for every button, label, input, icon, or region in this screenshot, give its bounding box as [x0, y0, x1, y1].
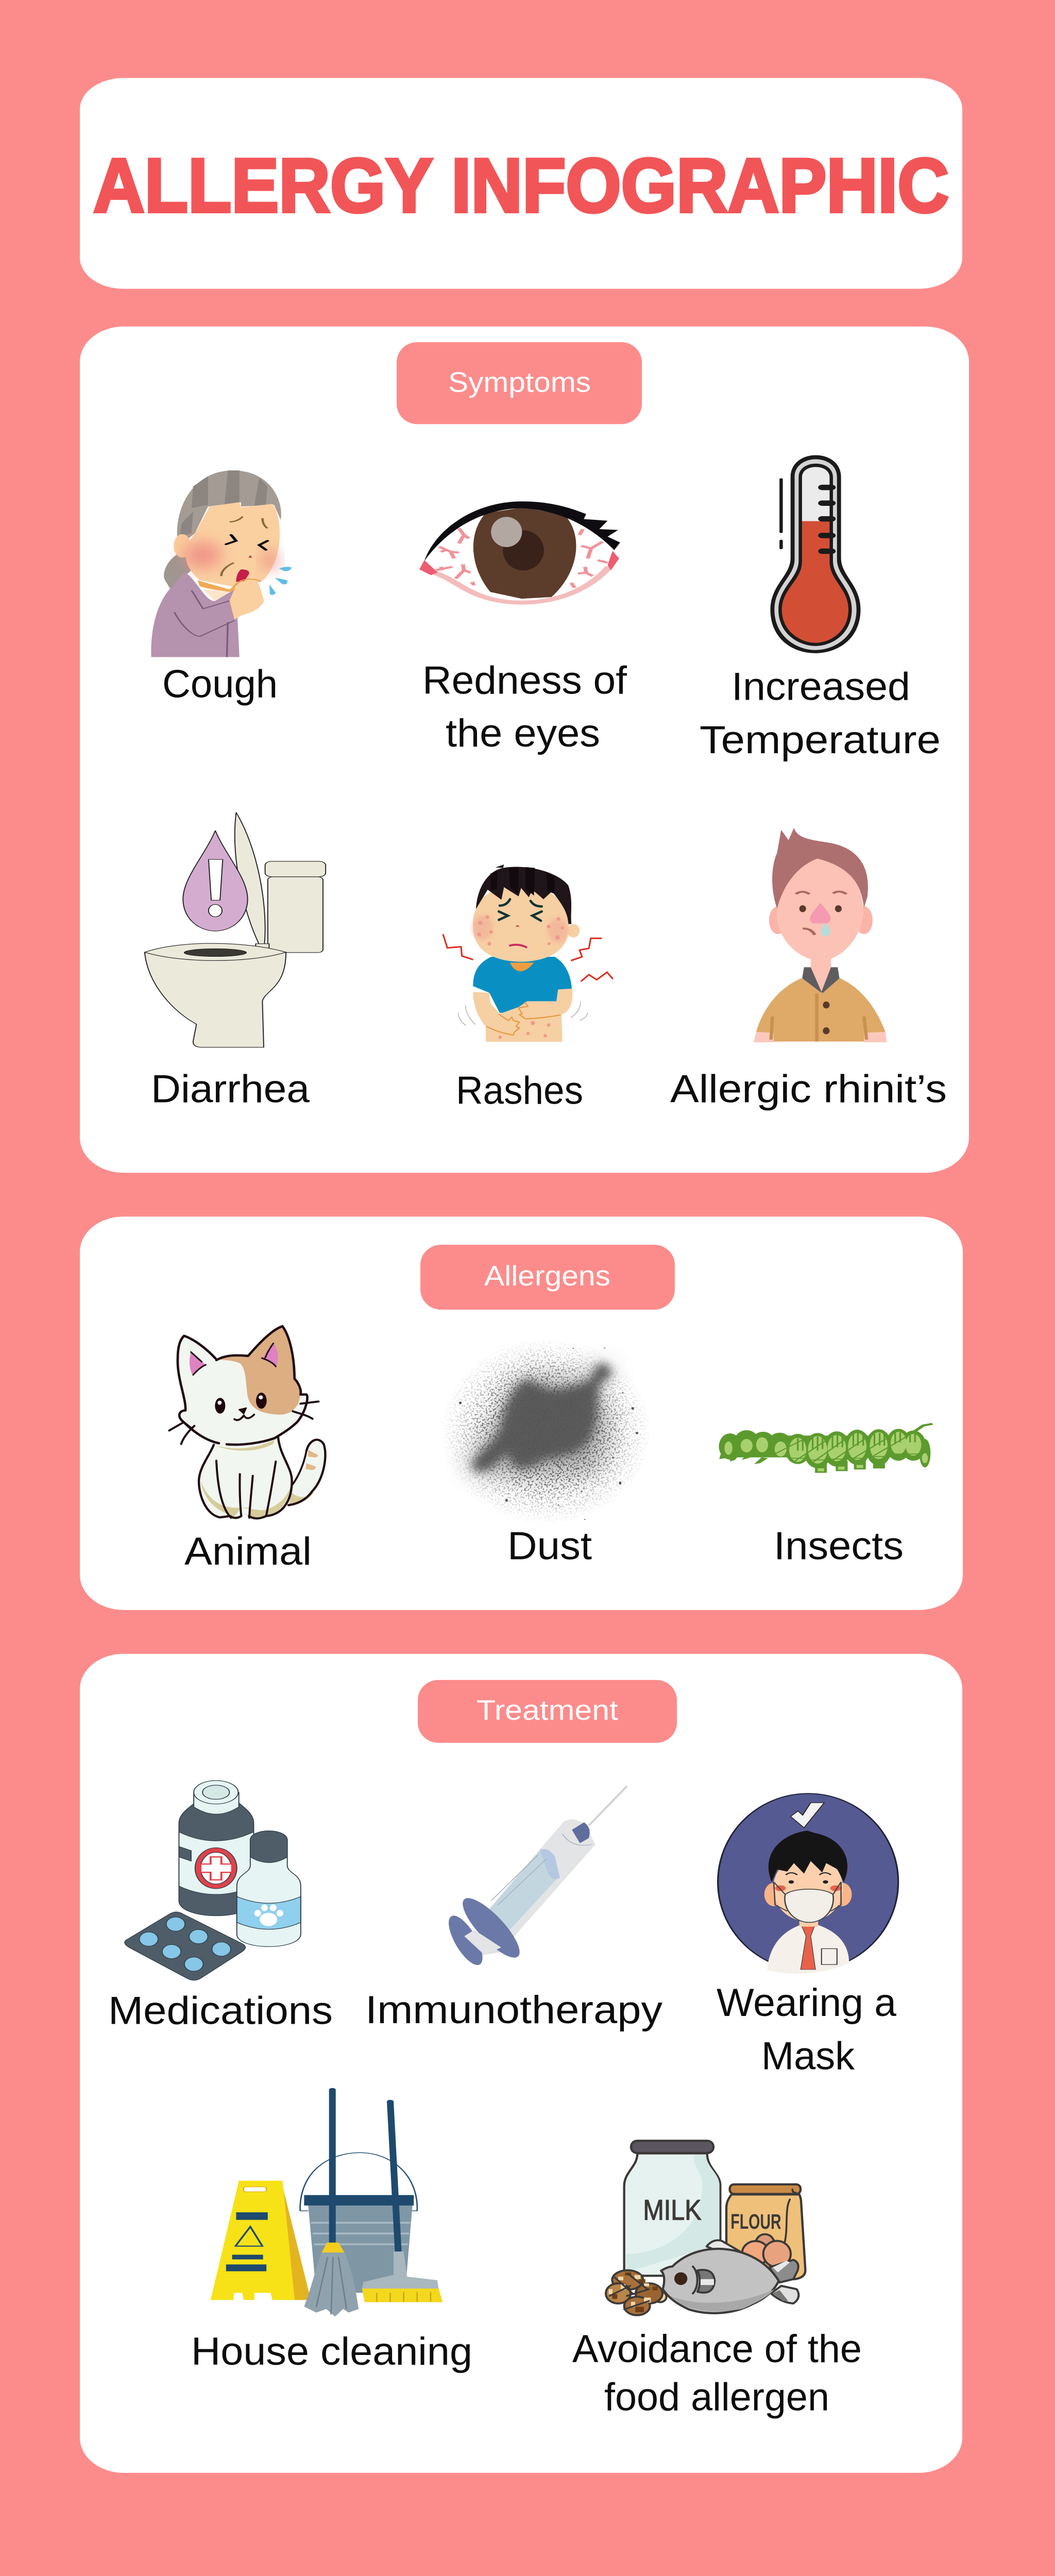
- label: redness of the eyes: the eyes: [446, 711, 600, 755]
- icon: syringe: [442, 1786, 627, 1967]
- label: insects: Insects: [774, 1524, 904, 1568]
- icon: cough: [151, 470, 292, 657]
- panel: treatment: [80, 1654, 962, 2473]
- title panel: [80, 78, 962, 289]
- label: medications: Medications: [108, 1989, 333, 2033]
- heading: allergens: [420, 1245, 675, 1310]
- label: wearing a mask: Mask: [761, 2034, 855, 2078]
- label: avoidance of the food allergen: food allergen: [604, 2376, 829, 2419]
- icon: red eye: [419, 501, 620, 604]
- label: redness of the eyes: [422, 659, 627, 755]
- label: house cleaning: House cleaning: [191, 2330, 472, 2374]
- text: flour: FLOUR: [730, 2210, 781, 2233]
- label: wearing a mask: Wearing a: [717, 1981, 896, 2025]
- label: animal: Animal: [184, 1530, 312, 1573]
- label: allergic rhinitis: Allergic rhinit’s: [670, 1067, 947, 1111]
- icon: food allergens: [606, 2141, 805, 2315]
- icon: rashes: [443, 865, 613, 1042]
- label: cough: Cough: [162, 662, 278, 706]
- label: increased temperature: Increased: [731, 665, 910, 708]
- icon: wearing a mask: [718, 1793, 898, 1974]
- label: avoidance of the food allergen: [572, 2327, 862, 2419]
- icon: dust: [440, 1338, 652, 1524]
- label: increased temperature: [700, 665, 941, 762]
- text: milk: MILK: [643, 2194, 702, 2226]
- panel: symptoms: [80, 327, 969, 1173]
- label: redness of the eyes: Redness of: [422, 659, 627, 702]
- icon: toilet: [145, 812, 326, 1047]
- icon: runny nose man: [754, 828, 887, 1042]
- icon: thermometer: [770, 455, 861, 653]
- heading: symptoms: Symptoms: [448, 366, 591, 398]
- heading: allergens: Allergens: [484, 1260, 610, 1292]
- title: ALLERGY INFOGRAPHIC: [93, 143, 949, 228]
- label: increased temperature: Temperature: [700, 718, 941, 762]
- label: wearing a mask: [717, 1981, 896, 2078]
- label: dust: Dust: [507, 1524, 592, 1568]
- heading: treatment: [418, 1680, 677, 1743]
- panel: allergens: [80, 1216, 963, 1610]
- heading: symptoms: [397, 342, 642, 424]
- icon: medications: [125, 1781, 301, 1980]
- label: avoidance of the food allergen: Avoidance of the: [572, 2327, 862, 2371]
- label: immunotherapy: Immunotherapy: [365, 1988, 662, 2032]
- icon: house cleaning: [211, 2090, 443, 2316]
- heading: treatment: Treatment: [477, 1694, 618, 1726]
- label: rashes: Rashes: [456, 1069, 583, 1112]
- icon: cat: [169, 1326, 325, 1518]
- icon: caterpillar: [719, 1424, 932, 1473]
- label: diarrhea: Diarrhea: [151, 1067, 310, 1111]
